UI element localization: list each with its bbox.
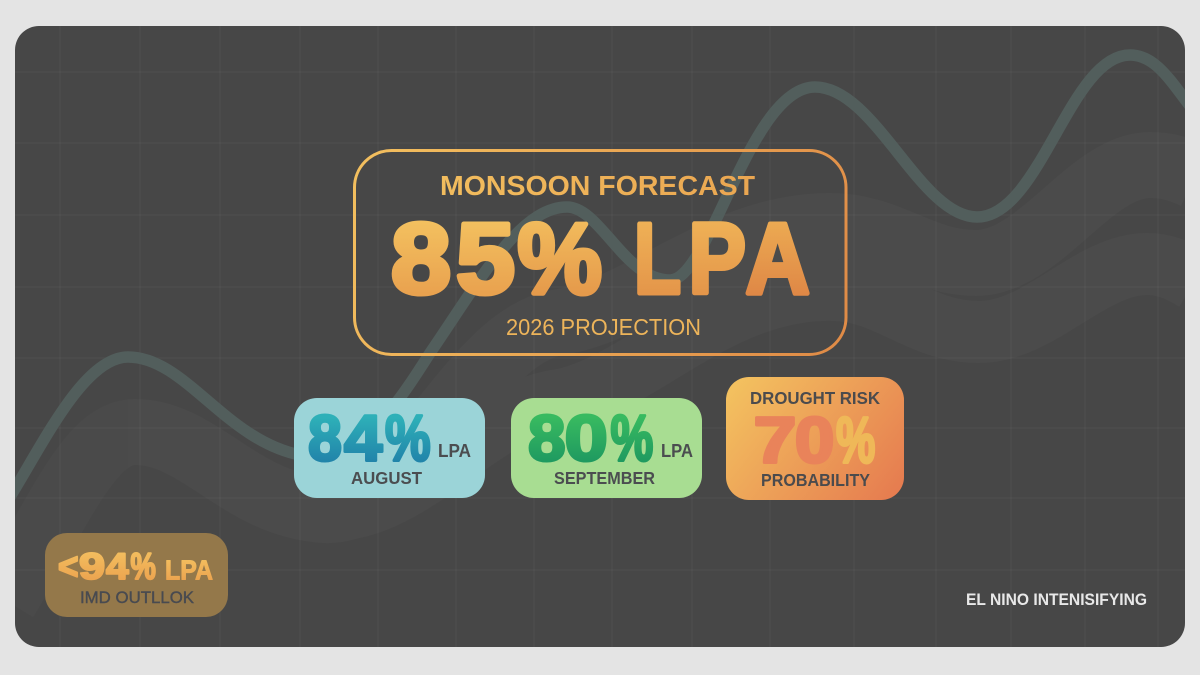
drought probability figure: %: [836, 404, 875, 477]
IMD figure: 9: [79, 546, 105, 587]
IMD unit: LPA: [165, 554, 213, 586]
IMD figure: %: [130, 545, 156, 587]
card: august: [294, 398, 485, 498]
heading: monsoon forecast: MONSOON FORECAST: [440, 170, 755, 201]
august unit: LPA: [438, 441, 471, 461]
main figure: 85% LPA: P: [688, 203, 746, 314]
main figure: 85% LPA: 8: [391, 204, 451, 315]
card background: [45, 533, 228, 617]
august figure: [308, 402, 431, 475]
card: IMD outlook: [45, 533, 228, 617]
september figure: [528, 403, 653, 475]
card background: [511, 398, 702, 498]
drought probability figure: 0: [795, 404, 834, 477]
probability label: PROBABILITY: [761, 470, 870, 490]
main figure: 85% LPA: %: [518, 203, 602, 315]
drought risk heading: DROUGHT RISK: [750, 388, 880, 408]
IMD label: IMD OUTLLOK: [80, 588, 195, 607]
footer note: el nino: EL NINO INTENISIFYING: [966, 591, 1147, 609]
main figure: 85% LPA: 5: [456, 203, 515, 314]
august label: AUGUST: [351, 468, 422, 488]
september label: SEPTEMBER: [554, 468, 655, 488]
wave trend line: [10, 55, 1190, 497]
IMD figure: 4: [106, 547, 129, 588]
september figure: 0: [564, 403, 608, 475]
card: drought risk: [726, 377, 904, 500]
IMD figure: [58, 545, 156, 588]
september figure: %: [610, 403, 653, 475]
main figure: 85% LPA: A: [746, 203, 810, 315]
main figure: 85% LPA: L: [634, 202, 681, 314]
august figure: %: [385, 403, 431, 475]
card: september: [511, 398, 702, 498]
box outline: [354, 150, 846, 354]
card background: [294, 398, 485, 498]
IMD figure: <: [58, 545, 79, 587]
drought probability figure: [754, 404, 875, 477]
august figure: 4: [344, 402, 382, 475]
september unit: LPA: [661, 441, 693, 461]
card background: [726, 377, 904, 500]
faint wave bands: [5, 165, 1195, 600]
subheading: 2026 projection: 2026 PROJECTION: [506, 314, 701, 340]
drought probability figure: 7: [754, 404, 797, 477]
september figure: 8: [528, 403, 566, 475]
august figure: 8: [308, 403, 342, 475]
main figure: 85% LPA: [391, 202, 810, 315]
main forecast box: [354, 150, 846, 354]
grid lines: [60, 72, 1158, 570]
